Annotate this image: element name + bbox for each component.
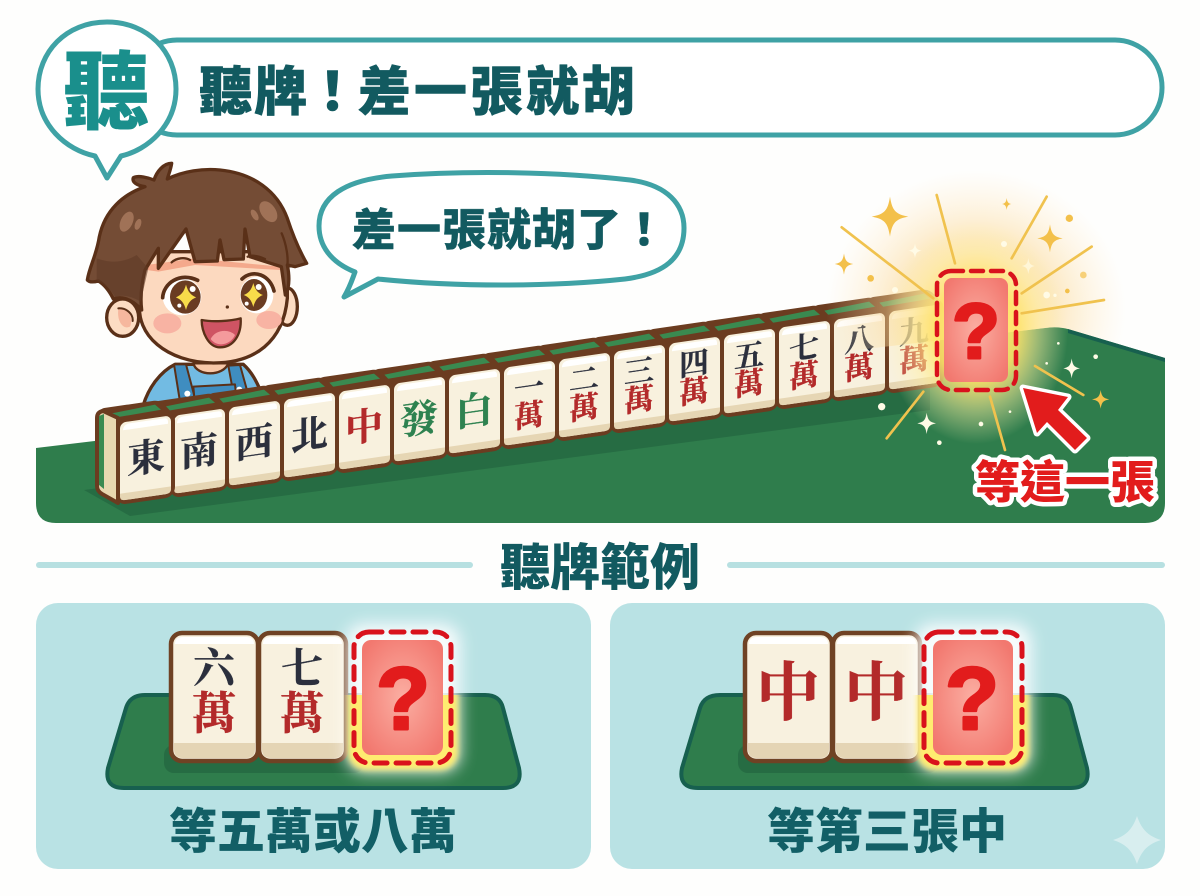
tile: 西: 西 [235, 410, 273, 470]
tile: 中: 中 [756, 642, 820, 734]
tile: 發: 發 [400, 386, 438, 446]
boy character [87, 163, 307, 415]
tile: 三萬: 三 [624, 345, 654, 393]
tile: 七萬: 七 [281, 636, 323, 696]
badge: 聽 speech bubble [38, 22, 176, 178]
panel: example left [36, 603, 591, 869]
eye right [240, 274, 274, 313]
tile: 六萬: 萬 [191, 677, 237, 742]
tile shadow [738, 745, 938, 773]
tile: 一萬: 萬 [514, 389, 544, 437]
fringe shadow [147, 258, 280, 272]
speech bubble: boy [319, 173, 684, 297]
mystery tile: ? [945, 649, 999, 748]
tile: 白 [428, 351, 503, 459]
mystery tile [924, 632, 1022, 763]
tile: 中 [833, 633, 920, 761]
tile: 中 [318, 367, 393, 475]
tile: 七萬: 萬 [789, 349, 819, 397]
title bar [130, 40, 1162, 135]
panel: example right [610, 603, 1165, 869]
tile: 中: 中 [345, 394, 383, 454]
face [139, 252, 287, 363]
ear left [107, 299, 139, 336]
tile: 九萬: 九 [899, 305, 929, 353]
hair highlights [117, 198, 281, 234]
glow [915, 624, 1031, 772]
tile: 七萬: 萬 [279, 677, 325, 742]
brows [172, 256, 265, 262]
speech text: 差一張就胡了！ [352, 194, 667, 258]
tile: 五萬 [703, 311, 778, 419]
tile: 中 [745, 633, 832, 761]
tile: 一萬 [483, 343, 558, 451]
caption: 等五萬或八萬 [169, 792, 457, 862]
tile: 八萬 [813, 295, 888, 403]
mystery tile: hero: ? [952, 287, 1000, 375]
tile: 南 [153, 391, 228, 499]
title text: 聽牌！差一張就胡 [199, 50, 635, 126]
tile row [97, 287, 943, 503]
cheeks [153, 313, 181, 333]
mouth [202, 318, 241, 347]
arrow: points at mystery tile [1023, 388, 1087, 450]
table mat [107, 695, 520, 788]
caption: 等第三張中 [767, 792, 1007, 862]
tile: 東: 東 [127, 424, 165, 485]
tile: 六萬 [171, 633, 258, 761]
tile: 五萬: 五 [734, 329, 764, 377]
tile: 一萬: 一 [514, 361, 544, 409]
section heading [36, 528, 1165, 600]
mystery tile: ? [376, 649, 430, 748]
neck [193, 363, 228, 373]
tile: 五萬: 萬 [734, 357, 764, 405]
tile: 四萬: 萬 [679, 365, 709, 413]
tile: 七萬 [758, 303, 833, 411]
badge: 聽 speech bubble: 聽 [63, 22, 149, 147]
ear right [277, 288, 297, 325]
tile: 四萬 [648, 319, 723, 427]
tile: 南: 南 [180, 418, 218, 478]
label: 等這一張: 等這一張 [975, 446, 1155, 511]
tile: 六萬: 六 [193, 636, 239, 696]
tile: 八萬: 八 [844, 313, 874, 361]
tile: 發 [373, 359, 448, 467]
glow [346, 624, 460, 772]
tile: 七萬 [259, 633, 346, 761]
light rays and sparkles [835, 195, 1109, 450]
tile: 二萬: 二 [569, 353, 599, 401]
shirt [143, 364, 262, 415]
tile: 七萬: 七 [789, 321, 819, 369]
tile: 三萬 [593, 327, 668, 435]
tile: 二萬: 萬 [569, 381, 599, 429]
tile: 北: 北 [290, 402, 328, 462]
tile: 東 [97, 398, 174, 503]
table mat [681, 695, 1088, 788]
hair [87, 163, 307, 310]
nose [226, 305, 229, 309]
tile: 白: 白 [455, 378, 493, 438]
tile: 中: 中 [844, 642, 908, 734]
tile: 九萬 [868, 287, 943, 395]
eye left [163, 277, 201, 315]
tile shadow [164, 745, 364, 773]
mystery tile: hero [937, 271, 1016, 390]
tile: 西 [208, 383, 283, 491]
overalls [174, 364, 248, 405]
glow burst [832, 184, 1112, 441]
heading text: 聽牌範例 [500, 528, 700, 600]
sparkle [1113, 816, 1161, 864]
tile: 二萬 [538, 335, 613, 443]
tile: 九萬: 萬 [899, 333, 929, 381]
tile: 北 [263, 375, 338, 483]
table shadow under tiles [84, 380, 930, 516]
tile: 八萬: 萬 [844, 341, 874, 389]
hair shade [97, 255, 148, 302]
mystery tile [354, 632, 451, 763]
tile: 三萬: 萬 [624, 373, 654, 421]
tile: 四萬: 四 [679, 337, 709, 385]
mahjong table [36, 327, 1165, 523]
